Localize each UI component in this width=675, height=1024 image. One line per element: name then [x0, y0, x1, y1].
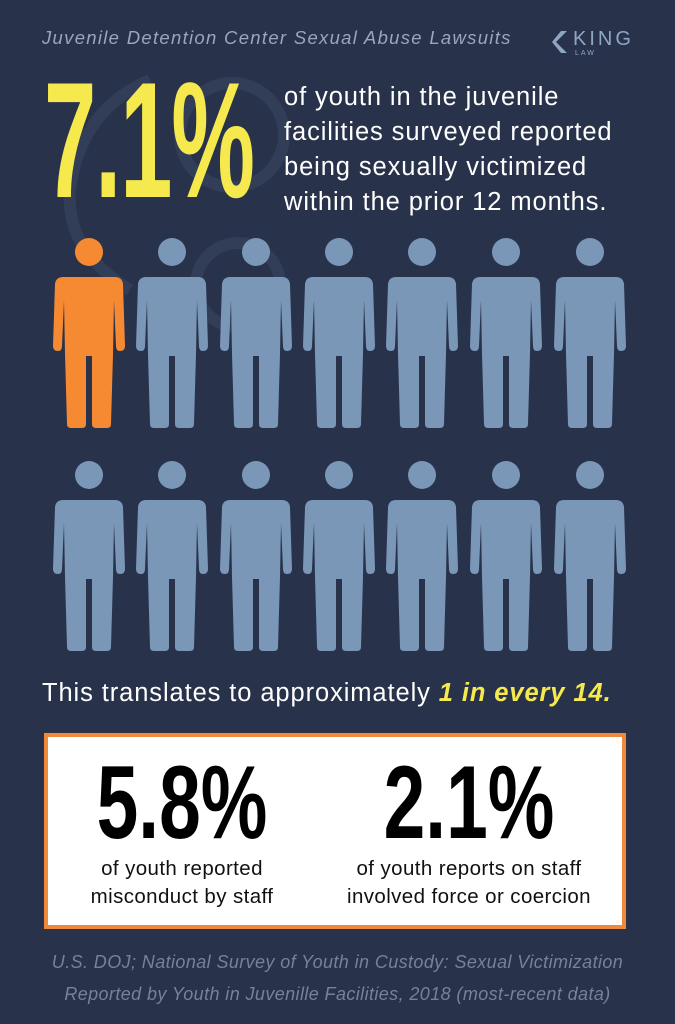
logo: King Law: KING [573, 28, 634, 50]
stat description: of youth in the juvenile [284, 83, 559, 111]
logo: King Law: LAW [575, 50, 596, 57]
stat description [284, 83, 613, 216]
pictogram: 14 figures [53, 238, 626, 651]
stat description: facilities surveyed reported [284, 118, 613, 146]
panel: stats box [44, 733, 626, 929]
header title: Juvenile Detention Center Sexual Abuse Lawsuits [42, 27, 512, 48]
source citation: Reported by Youth in Juvenille Facilities, 2018 (most-recent data) [64, 984, 611, 1004]
stat 2.1%: 2.1% [384, 745, 554, 861]
stat description: being sexually victimized [284, 153, 587, 181]
stat 5.8%: 5.8% [97, 745, 267, 861]
source citation [52, 952, 623, 1004]
translation text: This translates to approximately 1 in every 14. [42, 679, 612, 707]
stat 2.1%: involved force or coercion [347, 885, 591, 908]
big stat 7.1%: 7.1% [44, 48, 254, 232]
stat 5.8% [91, 745, 273, 908]
stat description: within the prior 12 months. [284, 188, 607, 216]
stat 2.1% [347, 745, 591, 908]
stat 5.8%: misconduct by staff [91, 885, 273, 908]
source citation: U.S. DOJ; National Survey of Youth in Custody: Sexual Victimization [52, 952, 623, 972]
stat 5.8%: of youth reported [101, 857, 263, 880]
stat 2.1%: of youth reports on staff [356, 857, 582, 880]
logo: King Law [552, 28, 634, 57]
